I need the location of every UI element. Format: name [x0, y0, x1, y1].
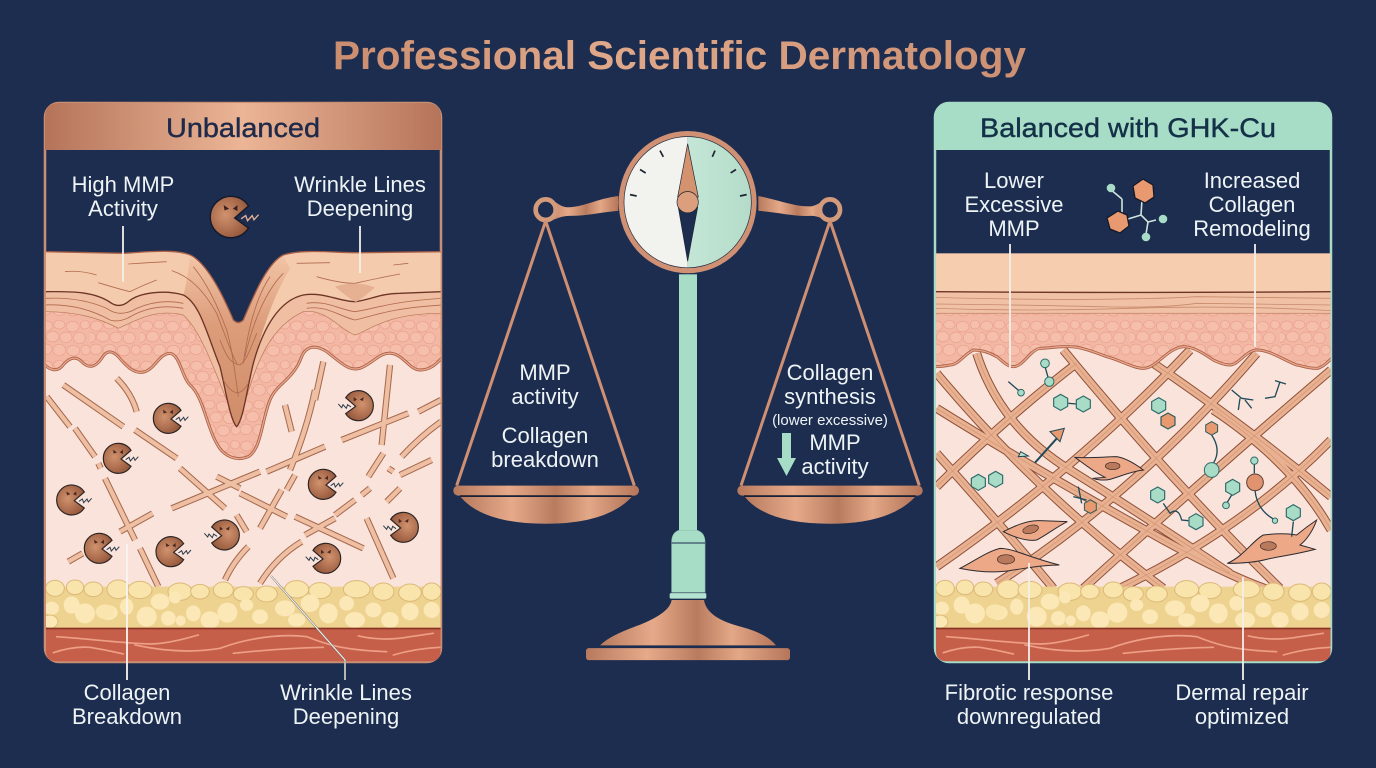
label: Wrinkle Lines Deepening (top) [294, 172, 426, 273]
right pan text: activity [801, 454, 869, 479]
label: Increased Collagen Remodeling: Collagen [1209, 192, 1295, 217]
muscle layer [935, 628, 1332, 662]
icon: MMP enzyme [210, 196, 259, 238]
panel: balanced with GHK-Cu [932, 103, 1332, 729]
epidermis cell layer [935, 312, 1332, 368]
right pan text [772, 360, 888, 479]
label: Fibrotic response downregulated: downregulated [957, 704, 1101, 729]
label: High MMP Activity: High MMP [72, 172, 174, 197]
left pan text: breakdown [491, 447, 599, 472]
fibroblasts [960, 457, 1317, 572]
panel: unbalanced [42, 103, 442, 729]
dermis [936, 348, 1331, 587]
label: Wrinkle Lines Deepening (top): Wrinkle Lines [294, 172, 426, 197]
label: Lower Excessive MMP [964, 168, 1064, 368]
label: Lower Excessive MMP: Excessive [964, 192, 1064, 217]
left pan strings [457, 221, 634, 486]
right pan [737, 486, 923, 524]
skin cross-section: repaired skin [932, 253, 1332, 662]
broken collagen fragments [47, 362, 441, 587]
dark epidermis line [45, 292, 442, 427]
left pan text: activity [511, 384, 579, 409]
label: Dermal repair optimized [1175, 577, 1309, 729]
molecule nodes [1018, 359, 1278, 523]
growth arrow [1018, 428, 1064, 463]
label: Collagen Breakdown: Collagen [84, 680, 170, 705]
left pan text [491, 360, 599, 472]
muscle layer [45, 628, 442, 662]
copper node [1247, 474, 1263, 491]
scale base [586, 600, 790, 660]
molecule links [1008, 367, 1293, 537]
dial [619, 131, 757, 273]
right pan text: synthesis [784, 384, 876, 409]
label: Collagen Breakdown [72, 544, 182, 729]
subcutaneous fat [42, 580, 442, 629]
label: Increased Collagen Remodeling: Remodeling [1193, 216, 1311, 241]
title: Professional Scientific Dermatology [333, 34, 1027, 78]
label: Increased Collagen Remodeling [1193, 168, 1311, 347]
scale artwork [453, 131, 923, 660]
skin cross-section: aged skin [42, 251, 442, 662]
label: Lower Excessive MMP: Lower [984, 168, 1044, 193]
panel header: Unbalanced [45, 103, 441, 150]
skin surface shadow [45, 251, 442, 322]
right pan text: Collagen [787, 360, 873, 385]
label: Increased Collagen Remodeling: Increased [1204, 168, 1300, 193]
dermis [45, 327, 442, 593]
wrinkle core [183, 256, 290, 427]
left pan text: MMP [519, 360, 571, 385]
balance scale [453, 131, 923, 660]
left pan text: Collagen [502, 423, 588, 448]
label: Fibrotic response downregulated: Fibrotic response [945, 680, 1113, 705]
lower stratum band [46, 292, 440, 400]
epidermis cell layer [46, 312, 440, 458]
basement membrane [45, 347, 442, 459]
label: Wrinkle Lines Deepening (bottom): Wrinkle Lines [280, 680, 412, 705]
panel header: Balanced with GHK-Cu [935, 103, 1331, 150]
label: Lower Excessive MMP: MMP [988, 216, 1040, 241]
icon: GHK-Cu molecule [1107, 179, 1167, 241]
label: Wrinkle Lines Deepening (bottom) [271, 576, 412, 729]
label: Collagen Breakdown: Breakdown [72, 704, 182, 729]
right pan text: (lower excessive) [772, 412, 888, 429]
central post [669, 274, 707, 599]
panel header: Balanced with GHK-Cu: Balanced with GHK-Cu [980, 113, 1276, 143]
teal hexagons [971, 394, 1300, 530]
collagen bundles [937, 350, 1331, 598]
label: Wrinkle Lines Deepening (top): Deepening [307, 196, 413, 221]
right pan strings [741, 221, 919, 486]
stratum corneum [46, 252, 440, 344]
fine wrinkle lines [45, 262, 442, 397]
basement membrane [935, 347, 1332, 368]
panel header: Unbalanced: Unbalanced [166, 113, 320, 143]
left pan [453, 486, 639, 524]
label: High MMP Activity [72, 172, 174, 282]
MMP enzymes [57, 391, 418, 573]
subcutaneous fat [932, 580, 1332, 629]
label: Wrinkle Lines Deepening (bottom): Deepening [293, 704, 399, 729]
label: Fibrotic response downregulated [945, 563, 1113, 729]
arrow: down [777, 433, 796, 476]
panel frame: unbalanced [45, 103, 441, 662]
stratum bands [935, 292, 1332, 313]
label: Dermal repair optimized: Dermal repair [1175, 680, 1309, 705]
label: Dermal repair optimized: optimized [1195, 704, 1289, 729]
panel frame: balanced [935, 103, 1331, 662]
needle [677, 144, 698, 261]
scale arms [536, 196, 840, 222]
copper hexagons [1084, 413, 1218, 513]
right pan text: MMP [809, 430, 861, 455]
label: High MMP Activity: Activity [88, 196, 158, 221]
